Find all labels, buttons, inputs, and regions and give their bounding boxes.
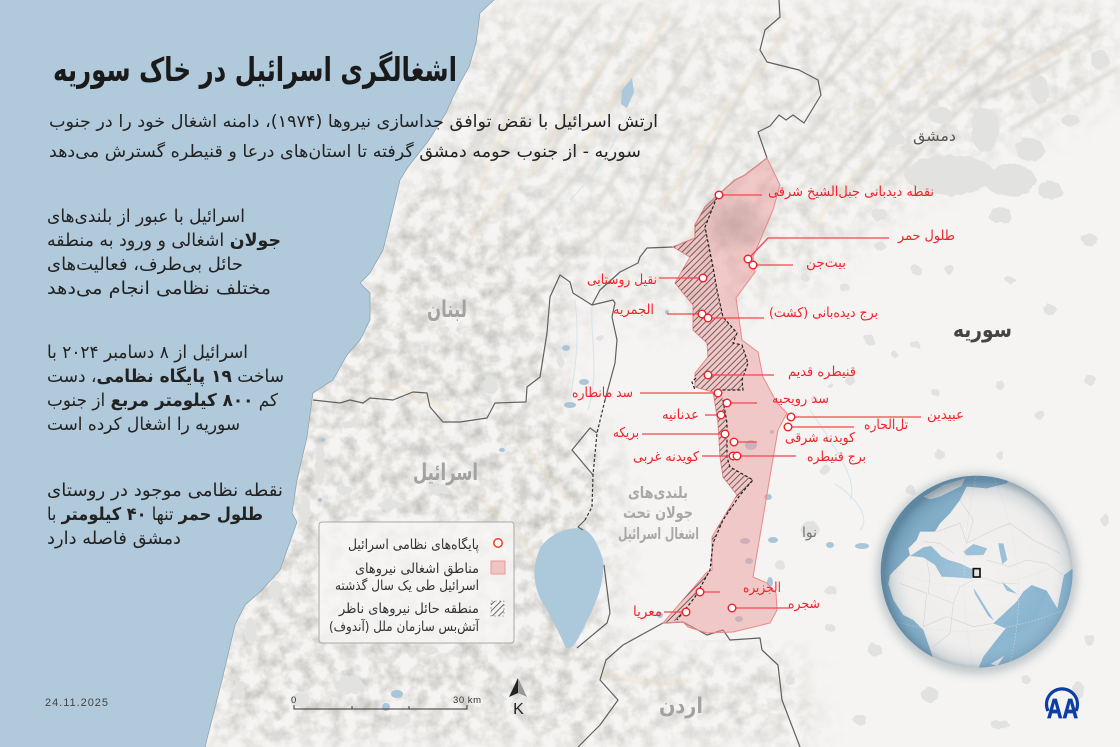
text block: Golan: حائل بی‌طرف، فعالیت‌های (47, 255, 243, 275)
leader lines (640, 195, 921, 612)
graticule (890, 475, 1067, 668)
subtitle (49, 112, 658, 162)
text block: bases (47, 343, 284, 435)
text block: Golan: جولان اشغالی و ورود به منطقه (47, 231, 281, 251)
place names: نوا (802, 525, 817, 541)
occupied area (pink) (663, 158, 787, 633)
base labels: معریا (633, 604, 662, 620)
legend labels: مناطق اشغالی نیروهای (355, 561, 479, 577)
buffer zone dashed boundary (677, 197, 753, 620)
base labels: الجزیره (743, 580, 781, 596)
scale bar (291, 695, 481, 709)
Mediterranean sea (0, 0, 494, 747)
text block: Tulul Humr: نقطه نظامی موجود در روستای (47, 481, 283, 501)
text block: Golan: اسرائیل با عبور از بلندی‌های (47, 207, 245, 227)
country borders (900, 500, 1063, 647)
place names: لبنان (427, 297, 467, 323)
base labels: سد رویحیه (772, 391, 829, 407)
Golan Heights label: جولان تحت (623, 503, 693, 522)
urban areas (234, 50, 1109, 730)
north arrow (509, 678, 527, 718)
legend (319, 522, 514, 643)
base labels: طلول حمر (897, 228, 955, 244)
legend hatch swatch (491, 601, 504, 616)
black and caspian sea (963, 543, 1007, 564)
text block: Tulul Humr: دمشق فاصله دارد (47, 529, 181, 549)
base labels: تل‌الحاره (864, 417, 908, 433)
base labels: کویدنه شرقی (785, 430, 856, 446)
base labels: سد مانطاره (572, 385, 633, 401)
base labels: بیت‌جن (806, 255, 846, 271)
legend labels: اسرائیل طی یک سال گذشته (335, 577, 479, 594)
place names: دمشق (913, 127, 956, 145)
hillshade in occupied area (709, 203, 761, 247)
Qaraoun lake (621, 78, 634, 108)
base labels: قنیطره قدیم (788, 364, 856, 380)
text block: Golan (47, 207, 281, 299)
country borders (313, 0, 821, 747)
base labels: عدنانیه (662, 407, 699, 423)
text block: Tulul Humr (47, 481, 283, 549)
greenland (923, 478, 965, 499)
madagascar (991, 656, 1004, 666)
legend marker (494, 539, 502, 547)
text block: bases: سوریه را اشغال کرده است (47, 415, 240, 435)
scale bar: 0 (291, 695, 296, 706)
Sea of Galilee (534, 528, 603, 648)
Mediterranean coastline (205, 0, 494, 747)
legend pink swatch (491, 561, 505, 574)
base labels: نقیل روستایی (587, 272, 657, 288)
AA logo (1046, 689, 1078, 724)
armistice dashed line (585, 400, 605, 520)
location box (973, 569, 980, 577)
legend labels: پایگاه‌های نظامی اسرائیل (348, 536, 479, 553)
scale bar: 30 km (453, 695, 481, 706)
Golan Heights label: اشغال اسرائیل (618, 524, 699, 543)
subtitle: سوریه - از جنوب حومه دمشق گرفته تا استان‌های درعا و قنیطره گسترش می‌دهد (49, 141, 641, 162)
atlantic and arctic ocean (880, 476, 1008, 657)
AA logo: AA (1047, 693, 1078, 724)
base labels: بریکه (613, 425, 639, 441)
base labels (572, 184, 964, 620)
Golan Heights label (618, 483, 699, 543)
UNDOF buffer zone hatch (663, 195, 753, 623)
locator globe (873, 470, 1080, 677)
base labels: عبیدین (927, 407, 964, 423)
subtitle: ارتش اسرائیل با نقض توافق جداسازی نیروها (۱۹۷۴)، دامنه اشغال خود را در جنوب (49, 112, 658, 132)
text block: Golan: مختلف نظامی انجام می‌دهد (47, 279, 271, 299)
place names (413, 127, 1012, 719)
base labels: شجره (788, 596, 820, 612)
mediterranean sea (910, 546, 974, 579)
north arrow: K (513, 701, 524, 718)
place names: اسرائیل (413, 460, 478, 486)
base labels: الجمریه (613, 302, 654, 318)
base markers (682, 191, 795, 616)
text block: bases: کم ۸۰۰ کیلومتر مربع از جنوب (47, 391, 279, 411)
mountain ridges (380, 4, 1115, 683)
title: اشغالگری اسرائیل در خاک سوریه (53, 50, 457, 90)
text block: Tulul Humr: طلول حمر تنها ۴۰ کیلومتر با (47, 505, 263, 525)
place names: اردن (659, 694, 703, 719)
Golan Heights label: بلندی‌های (628, 483, 688, 502)
text block: bases: اسرائیل از ۸ دسامبر ۲۰۲۴ با (47, 343, 248, 363)
base labels: برج قنیطره (807, 449, 866, 465)
base labels: کویدنه غربی (633, 449, 700, 465)
red sea and gulf (973, 582, 1017, 621)
legend labels (329, 536, 480, 635)
legend labels: آتش‌بس سازمان ملل (آندوف) (329, 618, 480, 635)
legend labels: منطقه حائل نیروهای ناظر (338, 601, 479, 617)
text block: bases: ساخت ۱۹ پایگاه نظامی، دست (47, 366, 284, 387)
streams and small water bodies (318, 110, 869, 711)
base labels: نقطه دیدبانی جبل‌الشیخ شرقی (768, 184, 934, 200)
base labels: برج دیده‌بانی (کشت) (769, 305, 878, 321)
date: 24.11.2025 (45, 697, 108, 709)
place names: سوریه (953, 318, 1012, 343)
indian ocean (978, 568, 1073, 668)
